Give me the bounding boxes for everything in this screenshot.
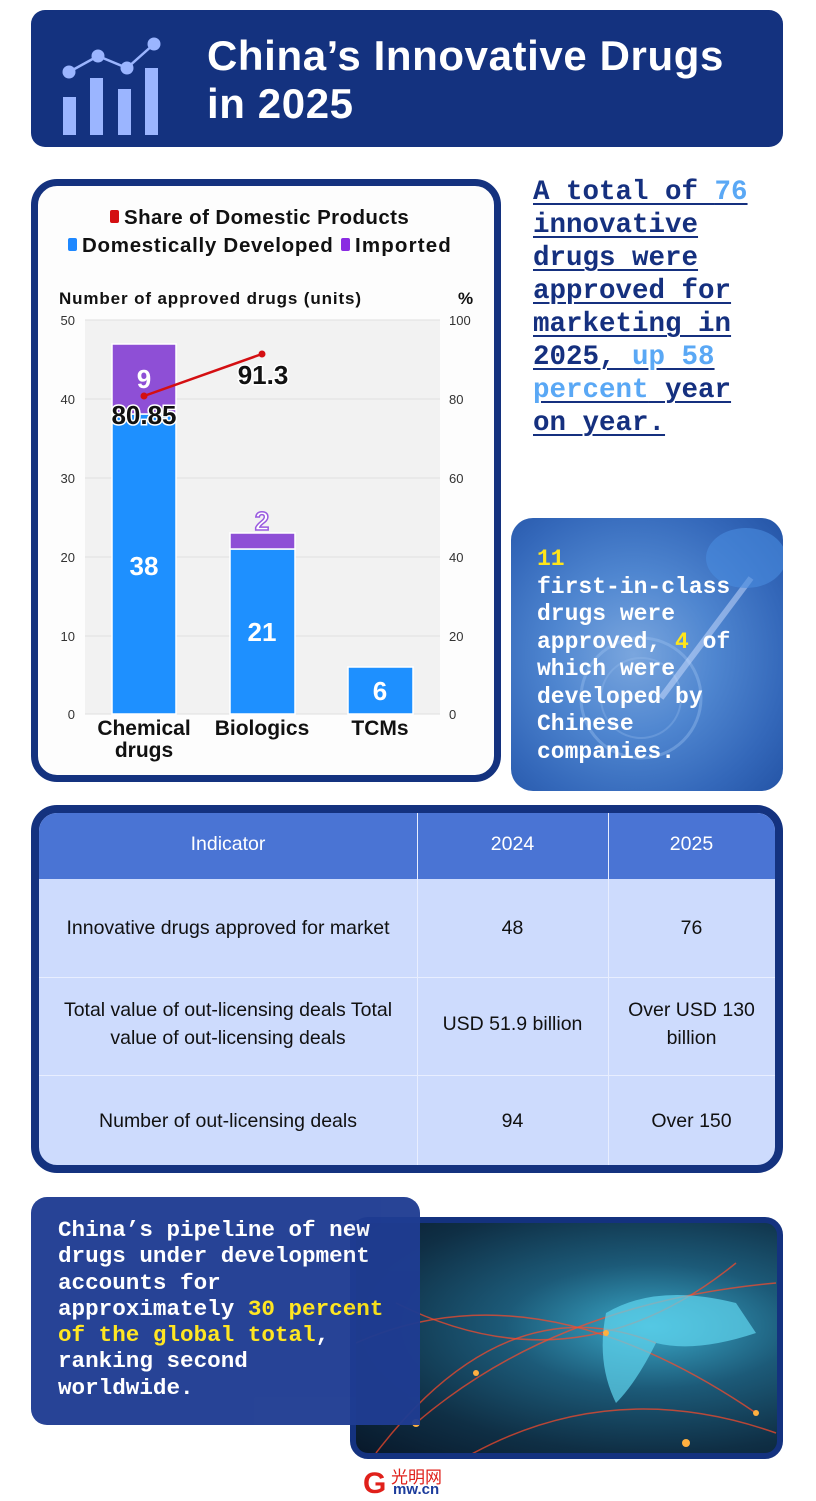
bar chart: %	[458, 289, 473, 308]
table header row: 2025	[670, 833, 713, 855]
bar chart: 100	[449, 313, 471, 328]
legend	[68, 206, 451, 257]
bar chart: 30	[61, 471, 75, 486]
bar chart: 0	[68, 707, 75, 722]
row: total value of out-licensing deals: USD 51.9 billion	[443, 1013, 582, 1035]
bar chart: Biologics	[215, 717, 309, 740]
text: 11 first-in-class drugs: first-in-class drugs were approved, 4 of which were developed by Chinese companies.	[537, 574, 730, 764]
logo: gmw.cn: mw.cn	[393, 1481, 439, 1498]
table: indicators	[31, 805, 783, 1173]
logo: gmw.cn	[363, 1463, 442, 1500]
panel: chart	[31, 179, 501, 782]
bars	[112, 344, 413, 714]
row: number of out-licensing deals	[99, 1110, 732, 1132]
title: in 2025	[207, 80, 354, 127]
table header row	[191, 833, 713, 855]
bar chart: 2	[255, 506, 269, 536]
icon: bar chart with trend line	[62, 38, 160, 135]
bar chart: Chemical	[97, 717, 191, 740]
bar chart: TCMs	[351, 717, 409, 740]
bar chart: 20	[61, 550, 75, 565]
callout: pipeline share: China’s pipeline of new drugs under development accounts for approximately 30 percent of the global total, ranking second worldwide.	[58, 1217, 383, 1401]
row: number of out-licensing deals: Over 150	[651, 1110, 732, 1132]
bar chart: 21	[248, 617, 276, 647]
panel: first-in-class photo card	[511, 518, 783, 791]
bar chart: 0	[449, 707, 456, 722]
bar chart: 40	[449, 550, 463, 565]
row: innovative drugs approved: 48	[502, 917, 523, 939]
row: number of out-licensing deals: Number of out-licensing deals	[99, 1110, 357, 1132]
header banner	[31, 10, 783, 147]
table header row: Indicator	[191, 833, 265, 855]
text block: 76 innovative drugs: A total of 76 innovative drugs were approved for marketing in 2025, up 58 percent year on year.	[533, 177, 748, 439]
callout: pipeline share	[31, 1197, 420, 1425]
row: total value of out-licensing deals	[64, 999, 755, 1049]
legend: Imported	[355, 234, 451, 257]
legend: Share of Domestic Products	[124, 206, 409, 229]
bar chart: 10	[61, 629, 75, 644]
table header row: 2024	[491, 833, 534, 855]
legend: Domestically Developed	[82, 234, 333, 257]
bar chart	[59, 206, 473, 762]
bar chart: 91.3	[238, 360, 288, 390]
logo: gmw.cn: 光明网	[391, 1463, 442, 1488]
row: innovative drugs approved: 76	[681, 917, 702, 939]
bar chart: 20	[449, 629, 463, 644]
row: innovative drugs approved	[66, 917, 702, 939]
row: number of out-licensing deals: 94	[502, 1110, 523, 1132]
title: China’s Innovative Drugs	[207, 32, 724, 79]
logo: gmw.cn: G	[363, 1467, 386, 1500]
bar chart: 40	[61, 392, 75, 407]
row: total value of out-licensing deals: Total value of out-licensing deals Total value of out-licensing deals	[64, 999, 392, 1049]
line: share of domestic products	[144, 354, 262, 396]
bar chart: Number of approved drugs (units)	[59, 289, 361, 308]
text: 11 first-in-class drugs: 11	[537, 546, 565, 572]
bar chart: 60	[449, 471, 463, 486]
bar chart: 38	[130, 551, 158, 581]
bar chart: 80.85	[111, 400, 177, 430]
row: innovative drugs approved: Innovative drugs approved for market	[66, 917, 390, 939]
image: global network map	[350, 1217, 783, 1459]
bar chart: drugs	[115, 739, 173, 762]
bar chart: 6	[373, 676, 387, 706]
bar chart: 80	[449, 392, 463, 407]
bar chart: 50	[61, 313, 75, 328]
row: total value of out-licensing deals: Over USD 130 billion	[628, 999, 755, 1049]
bar chart: 9	[137, 364, 151, 394]
title	[207, 32, 724, 127]
